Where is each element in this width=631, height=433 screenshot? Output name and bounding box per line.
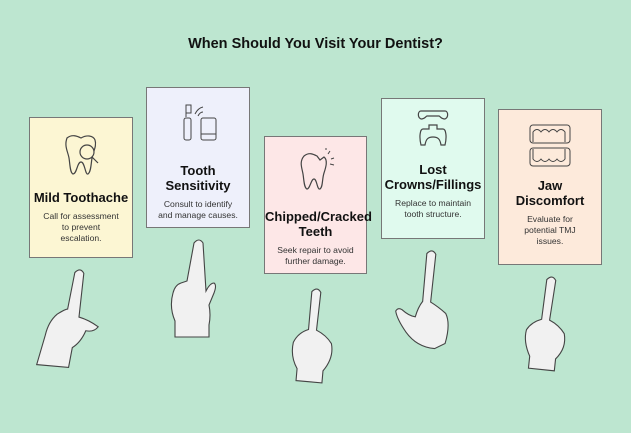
hand 4 xyxy=(393,248,455,350)
card: mild toothache xyxy=(29,117,133,258)
heading xyxy=(165,163,231,193)
description: Seek repair to avoid xyxy=(277,245,354,255)
heading: Discomfort xyxy=(516,193,584,208)
description: escalation. xyxy=(60,233,102,243)
heading: Tooth xyxy=(180,163,216,178)
description: Consult to identify xyxy=(164,199,232,209)
card: lost crowns/fillings xyxy=(381,98,485,239)
description xyxy=(524,214,576,246)
icon: crown xyxy=(418,110,448,146)
description: to prevent xyxy=(62,222,100,232)
heading: Chipped/Cracked xyxy=(265,209,372,224)
hand 3 xyxy=(290,287,337,383)
heading xyxy=(265,209,372,239)
description: further damage. xyxy=(285,256,346,266)
heading: Teeth xyxy=(299,224,332,239)
description: and manage causes. xyxy=(158,210,238,220)
title: When Should You Visit Your Dentist? xyxy=(188,36,443,52)
description: potential TMJ xyxy=(524,225,576,235)
card: chipped/cracked teeth xyxy=(264,136,367,274)
heading xyxy=(516,178,584,208)
description: issues. xyxy=(537,236,563,246)
heading: Lost xyxy=(419,162,447,177)
description xyxy=(395,198,471,219)
heading: Mild Toothache xyxy=(34,190,128,205)
icon: teeth xyxy=(530,124,570,166)
description: Evaluate for xyxy=(527,214,573,224)
card: jaw discomfort xyxy=(498,109,602,265)
description xyxy=(158,199,238,220)
description: tooth structure. xyxy=(404,209,462,219)
heading: Crowns/Fillings xyxy=(385,177,481,192)
description xyxy=(43,211,119,243)
description: Replace to maintain xyxy=(395,198,471,208)
description xyxy=(277,245,354,266)
icon: tooth with magnifier xyxy=(65,135,98,175)
icon: toothbrush and cup xyxy=(184,104,216,140)
icon: chipped tooth xyxy=(300,148,334,190)
hand 1 xyxy=(37,267,103,370)
heading xyxy=(385,162,481,192)
card: tooth sensitivity xyxy=(146,87,250,228)
heading: Jaw xyxy=(538,178,562,193)
heading: Sensitivity xyxy=(165,178,231,193)
description: Call for assessment xyxy=(43,211,119,221)
hand 5 xyxy=(522,275,571,372)
hand 2 xyxy=(171,240,216,337)
